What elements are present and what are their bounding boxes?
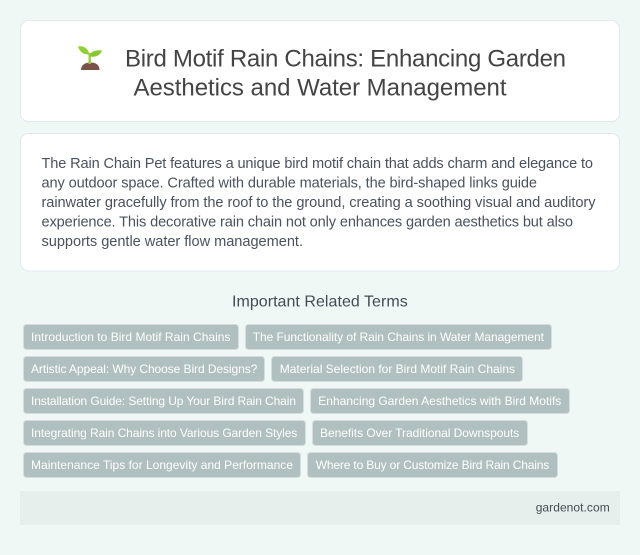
- tag: [308, 452, 558, 478]
- tag: [310, 388, 570, 414]
- footer: [20, 491, 620, 525]
- tag: [24, 388, 304, 414]
- tag: [24, 324, 238, 350]
- tag: Integrating Rain Chains into Various Garden Styles: [31, 426, 297, 440]
- description text: supports gentle water flow management.: [42, 234, 303, 250]
- tag: Enhancing Garden Aesthetics with Bird Motifs: [318, 394, 561, 408]
- icon: seedling: [78, 46, 102, 70]
- tag: Maintenance Tips for Longevity and Performance: [31, 458, 293, 472]
- tag: [24, 452, 300, 478]
- tag: [272, 356, 522, 382]
- tag: [24, 420, 306, 446]
- tag: Introduction to Bird Motif Rain Chains: [31, 330, 230, 344]
- description text: rainwater gracefully from the roof to the ground, creating a soothing visual and auditory: [42, 195, 596, 211]
- tag: Material Selection for Bird Motif Rain Chains: [280, 362, 515, 376]
- title: Bird Motif Rain Chains: Enhancing Garden: [125, 46, 566, 73]
- footer site name: gardenot.com: [536, 501, 610, 515]
- tag: Benefits Over Traditional Downspouts: [320, 426, 519, 440]
- description text: any outdoor space. Crafted with durable materials, the bird-shaped links guide: [42, 176, 537, 192]
- description text: experience. This decorative rain chain not only enhances garden aesthetics but also: [42, 214, 573, 230]
- panel: description: [20, 134, 620, 271]
- tag: Artistic Appeal: Why Choose Bird Designs?: [31, 362, 258, 376]
- heading: important related terms: Important Related Terms: [232, 294, 408, 311]
- title: [125, 46, 566, 102]
- tag: [312, 420, 528, 446]
- panel: title card: [20, 20, 620, 122]
- description text: The Rain Chain Pet features a unique bird motif chain that adds charm and elegance to: [42, 156, 593, 172]
- tag: The Functionality of Rain Chains in Water Management: [253, 330, 545, 344]
- tag: Where to Buy or Customize Bird Rain Chains: [316, 458, 549, 472]
- title: Aesthetics and Water Management: [134, 74, 507, 102]
- tag: [246, 324, 552, 350]
- tag: [24, 356, 264, 382]
- tag: Installation Guide: Setting Up Your Bird Rain Chain: [31, 394, 296, 408]
- panel: related term tags: [24, 324, 570, 478]
- description text: [42, 156, 596, 250]
